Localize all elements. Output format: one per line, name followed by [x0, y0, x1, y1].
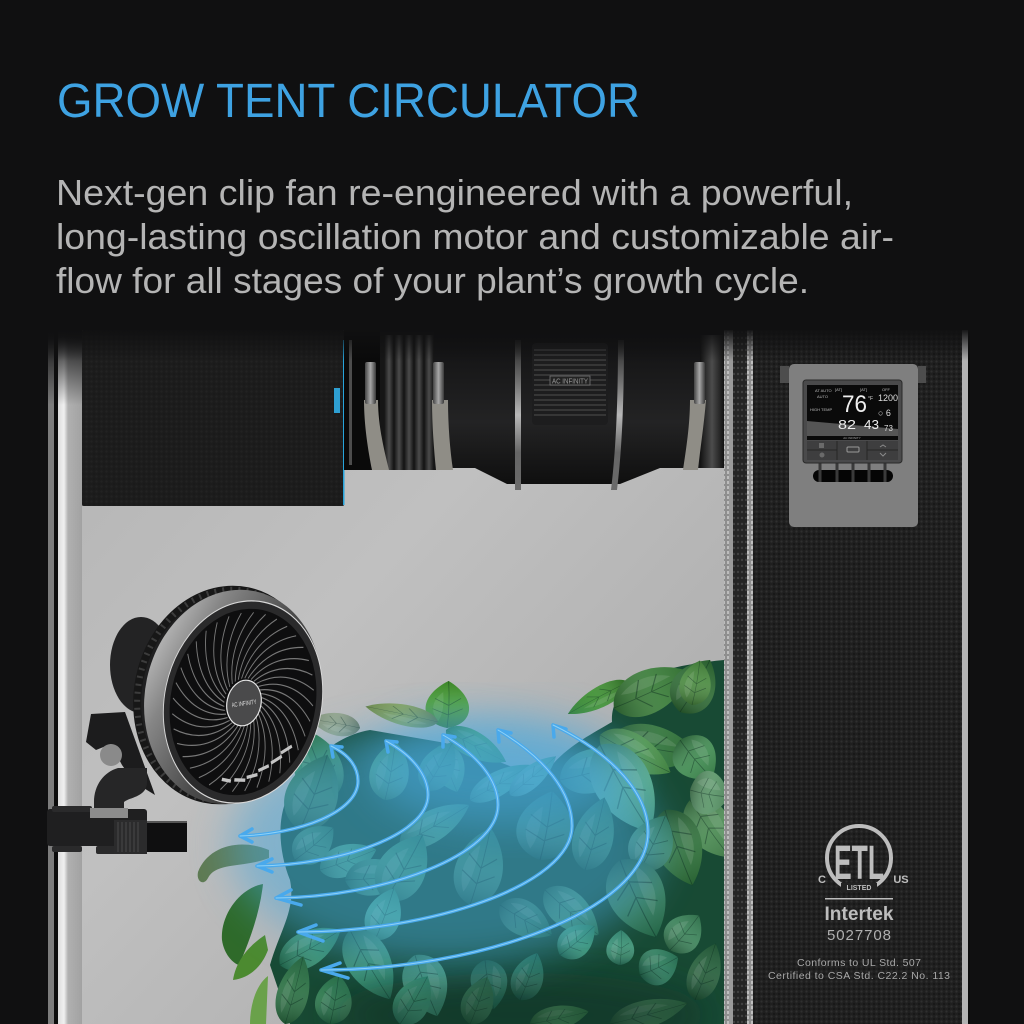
controller frame: [803, 380, 902, 463]
airflow glow: [230, 715, 660, 965]
clip fan: [47, 573, 342, 854]
lower leaves: [270, 882, 730, 1024]
description: long-lasting oscillation motor and customizable air-: [56, 216, 894, 257]
arrow 2: [257, 741, 428, 872]
fan front grille: [145, 586, 341, 818]
controller display: OFF: [882, 387, 891, 392]
tent pole: [48, 330, 82, 1024]
plant dark mass: [270, 660, 724, 1024]
divider rule: [825, 898, 893, 900]
ETL certification: [768, 826, 950, 982]
arrow 1: [240, 746, 358, 842]
description: Next-gen clip fan re-engineered with a powerful,: [56, 172, 853, 213]
arrow 4: [298, 730, 572, 941]
upper leaves: [318, 660, 724, 885]
standards: Conforms to UL Std. 507: [797, 957, 921, 969]
vent: [532, 343, 608, 425]
controller display: ○ 6: [878, 408, 891, 418]
pole top fade: [44, 325, 82, 405]
silver outer ring: [124, 573, 342, 821]
title: GROW TENT CIRCULATOR: [57, 75, 640, 128]
ETL mark: C: [818, 874, 826, 886]
fan body: [434, 330, 724, 484]
controller display: 43: [864, 417, 879, 432]
controller display: 73: [884, 424, 893, 433]
rail clip: [47, 806, 187, 854]
description: flow for all stages of your plant’s growth cycle.: [56, 260, 809, 301]
ribbed rear ring: [118, 573, 334, 817]
controller display: [AT]: [835, 387, 842, 392]
ETL mark: ETL: [834, 837, 884, 890]
controller display: AT AUTO: [815, 388, 832, 393]
controller display: °F: [868, 396, 873, 402]
controller display: AC INFINITY: [843, 436, 861, 440]
ETL mark: [818, 826, 909, 892]
controller display: HIGH TEMP: [810, 407, 832, 412]
tent zipper seam: [724, 330, 753, 1024]
ETL mark: US: [893, 874, 909, 886]
controller buttons: [807, 441, 898, 460]
panel: tent exterior fabric: [753, 330, 970, 1024]
controller plate: [789, 364, 918, 527]
bracket: [86, 712, 155, 795]
hose clamps: [364, 362, 706, 470]
ETL mark: LISTED: [847, 885, 871, 892]
controller display: 76: [842, 391, 867, 418]
fan hub with logo: AC INFINITY: [231, 699, 257, 709]
duct connector: [344, 330, 440, 470]
elbow arm: [94, 768, 147, 815]
standards line 2: Certified to CSA Std. C22.2 No. 113: [768, 970, 950, 982]
controller display: 1200: [878, 393, 898, 403]
metal bands: [515, 340, 624, 490]
arrow 3: [276, 735, 498, 905]
plant: basil leaves: [198, 649, 748, 1024]
controller: [780, 364, 926, 527]
controller display: 82: [838, 417, 856, 432]
motor housing: [110, 617, 172, 713]
drooping left leaves: [198, 845, 269, 1024]
controller display: AUTO: [817, 394, 828, 399]
inline duct fan: [344, 330, 724, 490]
plant base shadow: [330, 973, 710, 1024]
description: [56, 172, 894, 301]
certificate number: 5027708: [827, 927, 891, 944]
arrow 5: [321, 725, 648, 978]
airflow arrows: [240, 725, 648, 978]
vent: AC INFINITY: [552, 378, 588, 386]
controller display: [AT]: [860, 387, 867, 392]
controller display: [807, 385, 898, 440]
middle leaves: [284, 734, 673, 938]
Intertek: Intertek: [824, 904, 894, 925]
top fade over tent: [0, 325, 1024, 361]
carbon filter: [82, 330, 344, 506]
side clips: [780, 366, 926, 383]
panel: tent interior wall: [82, 330, 724, 1024]
controller slot: [813, 462, 893, 482]
fan hub with logo: [223, 677, 265, 729]
body right bellows: [700, 335, 724, 468]
